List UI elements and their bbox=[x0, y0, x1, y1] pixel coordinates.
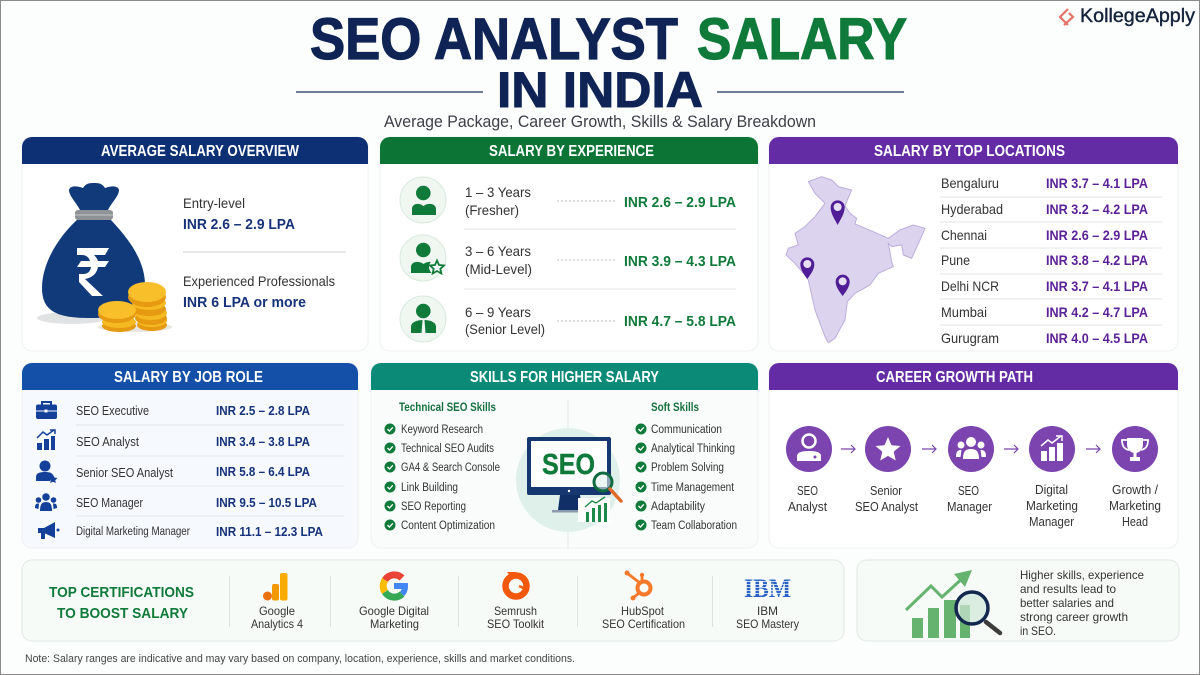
list: technical SEO skills: SEO Reporting bbox=[401, 501, 466, 513]
heading: top certifications: TO BOOST SALARY bbox=[57, 605, 188, 622]
title: SALARY bbox=[697, 7, 907, 72]
row: SEO Executive: INR 2.5 – 2.8 LPA bbox=[216, 403, 311, 418]
panel: skills for higher salary bbox=[371, 363, 758, 548]
cert: HubSpot SEO Certification bbox=[602, 570, 685, 631]
step: Growth / Marketing Head: Marketing bbox=[1109, 499, 1161, 513]
row: 6-9 years: (Senior Level) bbox=[465, 321, 545, 337]
title: IN INDIA bbox=[497, 62, 703, 118]
step: Senior SEO Analyst: Senior bbox=[870, 484, 902, 498]
icon: briefcase bbox=[36, 402, 57, 419]
header: average salary overview bbox=[22, 137, 368, 164]
cert: IBM SEO Mastery: IBM bbox=[744, 574, 791, 603]
title: SEO ANALYST bbox=[310, 7, 678, 72]
list: technical SEO skills: GA4 & Search Console bbox=[401, 462, 500, 474]
list: soft skills: Problem Solving bbox=[651, 462, 724, 474]
row: Senior SEO Analyst: Senior SEO Analyst bbox=[76, 466, 173, 480]
note: Note: Salary ranges are indicative and may vary based on company, location, experience, skills and market conditions. bbox=[25, 653, 575, 665]
step: Growth / Marketing Head: Head bbox=[1122, 515, 1148, 529]
row: SEO Executive bbox=[76, 403, 311, 418]
map: India with pins bbox=[786, 177, 925, 343]
cert: HubSpot SEO Certification: SEO Certification bbox=[602, 617, 685, 631]
table: locations: Chennai bbox=[941, 227, 987, 243]
table: locations: Mumbai bbox=[941, 304, 987, 320]
table: locations: Gurugram bbox=[941, 330, 999, 346]
panel: salary by top locations bbox=[769, 137, 1178, 351]
icon: money bag with coins bbox=[37, 183, 172, 332]
text: entry-level: INR 2.6 – 2.9 LPA bbox=[183, 217, 296, 233]
table: locations: Delhi NCR bbox=[941, 278, 999, 294]
table: locations: Pune bbox=[941, 252, 970, 268]
cert: Semrush SEO Toolkit: Semrush bbox=[494, 604, 537, 618]
step: Growth / Marketing Head: Growth / bbox=[1112, 483, 1158, 497]
cert: Google Digital Marketing: Google Digital bbox=[359, 604, 429, 618]
header: salary by top locations bbox=[769, 137, 1178, 164]
cert: IBM SEO Mastery: SEO Mastery bbox=[736, 617, 799, 631]
cert: Google Analytics 4: Google bbox=[259, 604, 295, 618]
header: salary by job role: SALARY BY JOB ROLE bbox=[114, 369, 263, 386]
list: technical SEO skills: Content Optimization bbox=[401, 520, 495, 532]
list: soft skills: Adaptability bbox=[651, 501, 705, 513]
row: 6-9 years: INR 4.7 – 5.8 LPA bbox=[624, 314, 737, 330]
panel: average salary overview bbox=[22, 137, 368, 351]
list: soft skills bbox=[636, 400, 737, 532]
text: growth message bbox=[1020, 568, 1144, 638]
step: SEO Analyst: SEO bbox=[797, 484, 818, 498]
text: growth message: strong career growth bbox=[1020, 610, 1128, 624]
header: skills for higher salary bbox=[371, 363, 758, 390]
step: SEO Analyst bbox=[786, 426, 832, 514]
cert: HubSpot SEO Certification: HubSpot bbox=[621, 604, 665, 618]
step: Growth / Marketing Head bbox=[1109, 426, 1161, 529]
list: soft skills: Communication bbox=[651, 424, 722, 436]
icon: team bbox=[35, 493, 57, 511]
heading: top certifications bbox=[49, 584, 194, 622]
table: locations: Hyderabad bbox=[941, 201, 1003, 217]
panel: salary by experience bbox=[380, 137, 758, 351]
step: SEO Manager: SEO bbox=[958, 484, 979, 498]
list: technical SEO skills: Technical SEO Skills bbox=[399, 400, 496, 414]
heading: top certifications: TOP CERTIFICATIONS bbox=[49, 584, 194, 601]
text: entry-level: Entry-level bbox=[183, 195, 245, 211]
table: locations bbox=[940, 175, 1162, 346]
row: 3-6 years: INR 3.9 – 4.3 LPA bbox=[624, 254, 737, 270]
logo: KollegeApply: KollegeApply bbox=[1080, 5, 1195, 27]
header: skills for higher salary: SKILLS FOR HIGHER SALARY bbox=[470, 369, 660, 386]
row: Senior SEO Analyst: INR 5.8 – 6.4 LPA bbox=[216, 464, 311, 479]
row: SEO Manager: INR 9.5 – 10.5 LPA bbox=[216, 495, 318, 510]
row: 6-9 years: 6 – 9 Years bbox=[465, 304, 531, 320]
step: Digital Marketing Manager: Digital bbox=[1035, 483, 1068, 497]
icon: SEO monitor: SEO bbox=[542, 449, 595, 481]
text: growth message: Higher skills, experience bbox=[1020, 568, 1144, 582]
list: technical SEO skills: Link Building bbox=[401, 482, 458, 494]
arrow bbox=[841, 445, 855, 453]
row: Digital Marketing Manager: INR 11.1 – 12.3 LPA bbox=[216, 524, 324, 539]
cert: IBM SEO Mastery: IBM bbox=[757, 604, 778, 618]
row: SEO Executive: SEO Executive bbox=[76, 404, 149, 418]
text: growth message: and results lead to bbox=[1020, 582, 1116, 596]
list: technical SEO skills: Keyword Research bbox=[401, 424, 483, 436]
row: Digital Marketing Manager bbox=[76, 524, 324, 539]
table: locations: INR 3.8 – 4.2 LPA bbox=[1046, 252, 1148, 268]
icon: SEO monitor bbox=[516, 428, 621, 532]
step: Senior SEO Analyst bbox=[855, 426, 918, 514]
step: Digital Marketing Manager bbox=[1026, 426, 1078, 529]
table: locations: INR 3.7 – 4.1 LPA bbox=[1046, 175, 1148, 191]
text: entry-level bbox=[183, 195, 296, 233]
row: 1-3 years: (Fresher) bbox=[465, 202, 519, 218]
list: technical SEO skills bbox=[384, 400, 500, 532]
step: SEO Manager: Manager bbox=[947, 500, 992, 514]
table: locations: INR 3.2 – 4.2 LPA bbox=[1046, 201, 1148, 217]
step: Senior SEO Analyst: SEO Analyst bbox=[855, 500, 918, 514]
row: SEO Manager bbox=[76, 495, 318, 510]
cert: Google Digital Marketing bbox=[359, 575, 429, 631]
step: Digital Marketing Manager: Marketing bbox=[1026, 499, 1078, 513]
row: 3-6 years bbox=[400, 235, 737, 281]
panel: salary by job role bbox=[22, 363, 358, 548]
text: growth message: in SEO. bbox=[1020, 624, 1056, 638]
header: salary by job role bbox=[22, 363, 358, 390]
text: growth message: better salaries and bbox=[1020, 596, 1114, 610]
panel: growth message bbox=[857, 560, 1179, 641]
header: career growth path bbox=[769, 363, 1178, 390]
list: soft skills: Team Collaboration bbox=[651, 520, 737, 532]
table: locations: INR 3.7 – 4.1 LPA bbox=[1046, 278, 1148, 294]
step: Digital Marketing Manager: Manager bbox=[1029, 515, 1074, 529]
text: experienced professionals: Experienced Professionals bbox=[183, 273, 335, 289]
row: 1-3 years: INR 2.6 – 2.9 LPA bbox=[624, 195, 737, 211]
header: salary by experience bbox=[380, 137, 758, 164]
row: 1-3 years bbox=[400, 177, 737, 223]
row: SEO Analyst: INR 3.4 – 3.8 LPA bbox=[216, 434, 311, 449]
cert: Google Analytics 4 bbox=[251, 573, 303, 631]
header: career growth path: CAREER GROWTH PATH bbox=[876, 369, 1033, 386]
icon: growth chart with magnifier bbox=[906, 570, 1000, 638]
cert: Semrush SEO Toolkit: SEO Toolkit bbox=[487, 617, 545, 631]
row: Senior SEO Analyst bbox=[76, 464, 311, 480]
row: 3-6 years: 3 – 6 Years bbox=[465, 243, 531, 259]
subtitle: Average Package, Career Growth, Skills & Salary Breakdown bbox=[384, 113, 816, 131]
panel: career growth path bbox=[769, 363, 1178, 548]
panel: top certifications bbox=[22, 560, 844, 641]
title bbox=[296, 7, 907, 118]
text: experienced professionals: INR 6 LPA or more bbox=[183, 295, 306, 311]
list: technical SEO skills: Technical SEO Audits bbox=[401, 443, 494, 455]
step: SEO Manager bbox=[947, 426, 994, 514]
table: locations: INR 4.0 – 4.5 LPA bbox=[1046, 330, 1148, 346]
row: 1-3 years: 1 – 3 Years bbox=[465, 184, 531, 200]
header: average salary overview: AVERAGE SALARY OVERVIEW bbox=[101, 143, 299, 160]
header: salary by experience: SALARY BY EXPERIENCE bbox=[489, 143, 654, 160]
table: locations: Bengaluru bbox=[941, 175, 999, 191]
icon: senior analyst bbox=[36, 460, 58, 483]
cert: Google Analytics 4: Analytics 4 bbox=[251, 617, 303, 631]
table: locations: INR 2.6 – 2.9 LPA bbox=[1046, 227, 1148, 243]
cert: IBM SEO Mastery bbox=[736, 574, 799, 631]
icon: chart bbox=[37, 430, 55, 450]
list: soft skills: Time Management bbox=[651, 482, 735, 494]
row: Digital Marketing Manager: Digital Marketing Manager bbox=[76, 526, 190, 538]
row: SEO Analyst bbox=[76, 434, 311, 449]
list: soft skills: Soft Skills bbox=[651, 400, 699, 414]
arrow bbox=[922, 445, 936, 453]
row: 3-6 years: (Mid-Level) bbox=[465, 261, 532, 277]
row: SEO Analyst: SEO Analyst bbox=[76, 435, 139, 449]
text: experienced professionals bbox=[183, 273, 335, 311]
step: SEO Analyst: Analyst bbox=[788, 500, 827, 514]
icon: megaphone bbox=[38, 522, 60, 539]
list: soft skills: Analytical Thinking bbox=[651, 443, 735, 455]
table: locations: INR 4.2 – 4.7 LPA bbox=[1046, 304, 1148, 320]
row: SEO Manager: SEO Manager bbox=[76, 496, 143, 510]
row: 6-9 years bbox=[400, 296, 737, 342]
arrow bbox=[1004, 445, 1018, 453]
cert: Semrush SEO Toolkit bbox=[487, 572, 545, 631]
cert: Google Digital Marketing: Marketing bbox=[370, 617, 419, 631]
arrow bbox=[1086, 445, 1100, 453]
header: salary by top locations: SALARY BY TOP LOCATIONS bbox=[874, 143, 1065, 160]
